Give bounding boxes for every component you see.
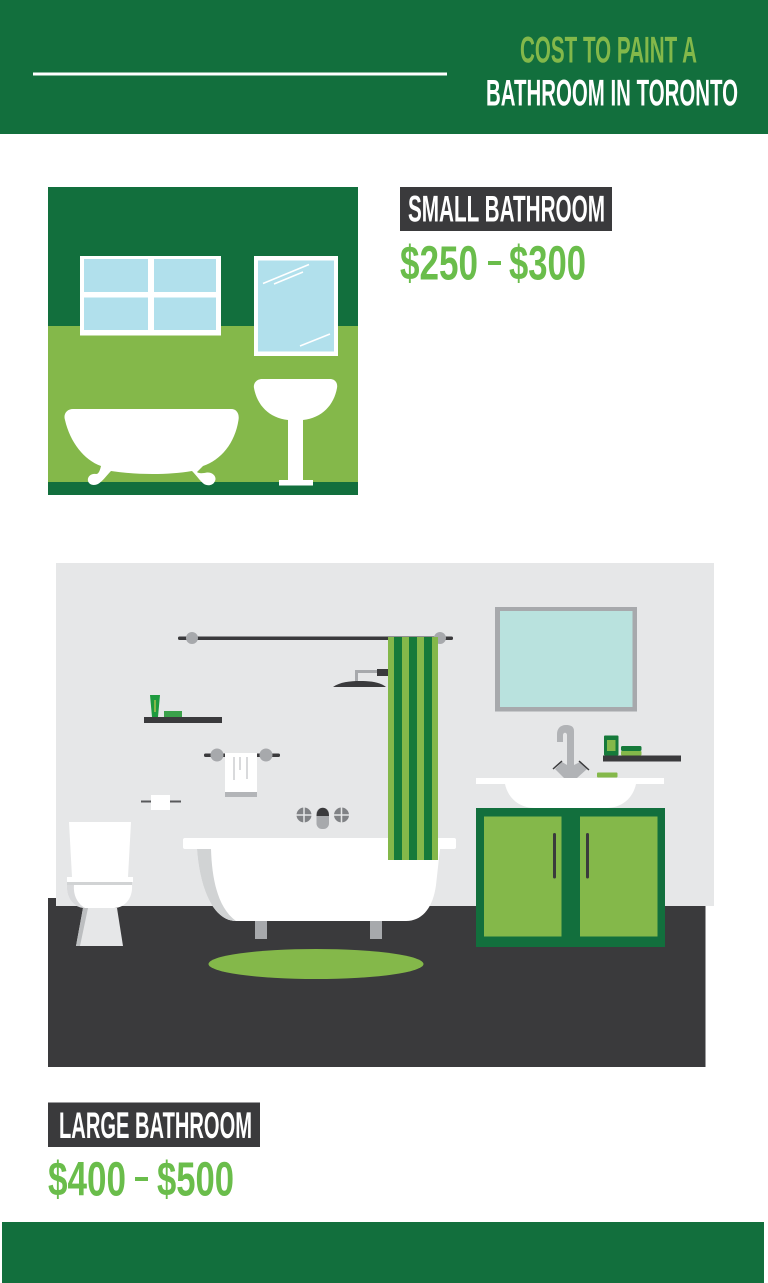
label: large bathroom: LARGE BATHROOM <box>59 1105 252 1146</box>
bathtub <box>183 838 456 939</box>
shower curtain <box>388 637 438 860</box>
icon: window <box>80 256 221 336</box>
price: small bathroom <box>400 238 586 290</box>
sink basin and counter <box>476 772 664 808</box>
icon: pedestal sink <box>254 379 337 486</box>
vanity cabinet <box>476 808 665 947</box>
label: small bathroom: SMALL BATHROOM <box>408 188 605 230</box>
shower head <box>333 669 389 687</box>
bath rug <box>208 949 424 979</box>
header banner <box>0 0 768 134</box>
bath taps <box>296 808 349 829</box>
towel rail and towel <box>204 748 280 797</box>
price: large bathroom: $400 <box>48 1154 126 1206</box>
price: small bathroom: $250 <box>400 238 478 290</box>
label: small bathroom <box>400 187 612 231</box>
toilet <box>67 822 133 946</box>
shelf with soap and cup <box>603 736 681 762</box>
shelf with toiletries <box>144 695 222 723</box>
wall mirror <box>495 607 637 712</box>
panel: small bathroom illustration <box>48 187 358 495</box>
icon: mirror <box>254 256 338 356</box>
footer banner <box>2 1222 764 1283</box>
shower rod <box>178 632 453 644</box>
price: large bathroom <box>48 1154 234 1206</box>
panel: large bathroom illustration <box>48 563 714 1067</box>
label: large bathroom <box>48 1102 260 1147</box>
title <box>486 30 738 114</box>
sink faucet <box>553 725 589 778</box>
price: large bathroom: $500 <box>157 1154 234 1206</box>
price: small bathroom: $300 <box>509 238 586 290</box>
toilet paper holder <box>141 795 181 810</box>
icon: bathtub <box>64 409 239 485</box>
